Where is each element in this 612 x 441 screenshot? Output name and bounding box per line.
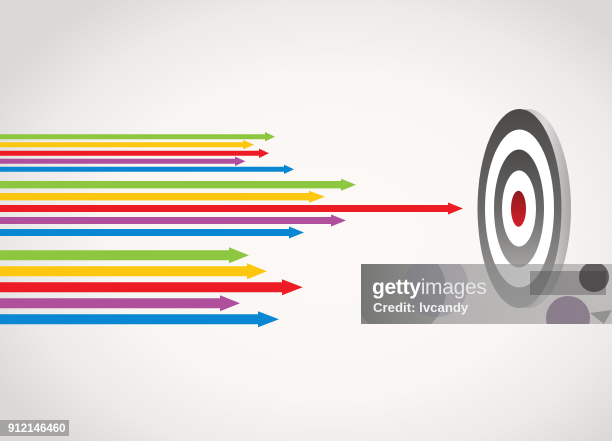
target inner white ring — [502, 170, 536, 246]
arrow: red thin — [0, 149, 269, 158]
watermark decorative circles — [361, 264, 612, 324]
target outer dark ring — [478, 109, 562, 308]
arrow: purple thin — [0, 157, 246, 166]
badge number: 912146460 — [8, 423, 66, 435]
arrow group: lower thick arrows — [0, 247, 303, 327]
arrow: red thick — [0, 279, 303, 295]
arrow: blue thick — [0, 311, 279, 327]
arrow: green thin — [0, 132, 275, 141]
watermark credit text: Credit: lvcandy — [373, 300, 469, 315]
arrow: purple medium — [0, 214, 346, 226]
arrow: green thick — [0, 247, 249, 263]
arrow: yellow thin — [0, 140, 254, 149]
arrow: blue medium — [0, 226, 304, 238]
target inner dark ring — [494, 150, 544, 268]
watermark backdrop — [361, 264, 612, 324]
target — [478, 109, 571, 308]
arrow group: top thin arrows — [0, 132, 294, 174]
arrow group: middle arrows — [0, 179, 463, 238]
target side edge — [485, 109, 571, 308]
target red bullseye — [511, 191, 526, 227]
arrow: green medium — [0, 179, 356, 191]
arrow: purple thick — [0, 295, 240, 311]
badge background — [0, 420, 69, 436]
arrow: blue thin — [0, 165, 294, 174]
arrow: yellow thick — [0, 263, 267, 279]
watermark panel — [361, 264, 612, 324]
arrow: yellow medium — [0, 191, 325, 203]
image id badge — [0, 420, 69, 436]
watermark logo text: gettyimages — [372, 276, 487, 299]
target outer white ring — [485, 130, 554, 288]
arrow: red long, reaching the target — [0, 202, 463, 214]
